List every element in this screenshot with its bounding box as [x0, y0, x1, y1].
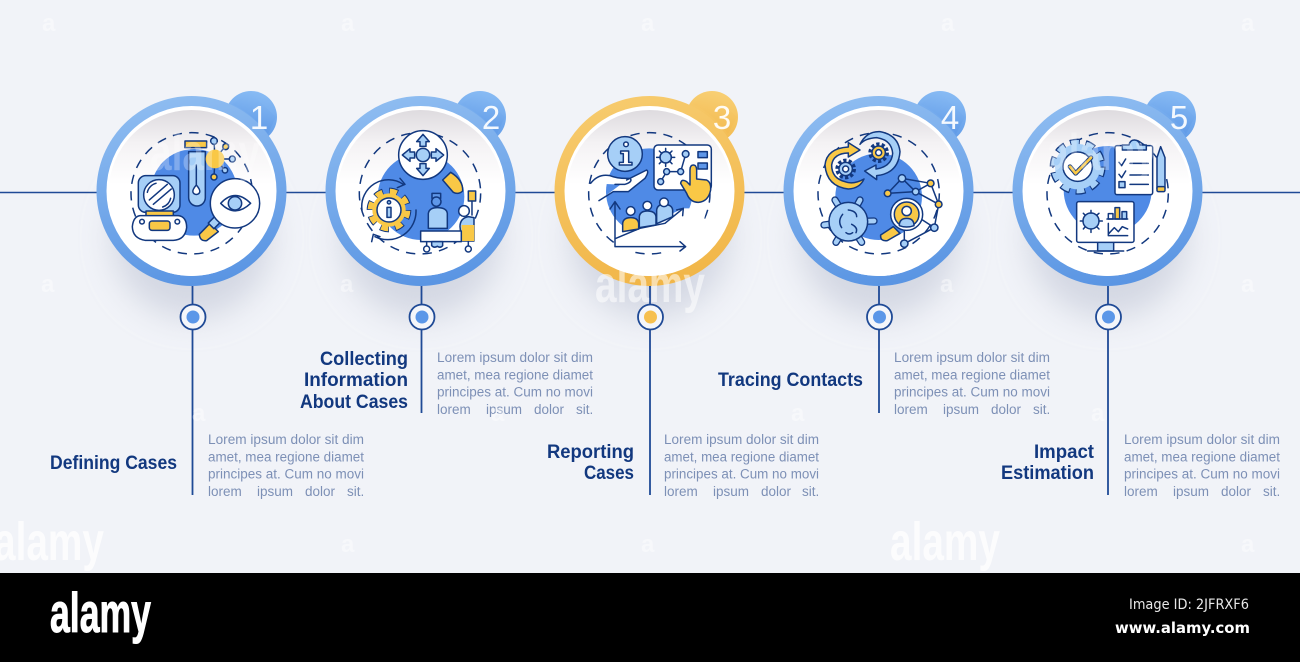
icon: scale, test tube, virus and eye magnifier [131, 133, 260, 254]
icon: check gear, clipboard, pencil, monitor [1047, 133, 1168, 254]
step 2 body text: Lorem ipsum dolor sit dim [437, 350, 593, 365]
watermarks: a [1241, 271, 1255, 298]
watermarks: a [791, 400, 805, 427]
footer website: www.alamy.com [1115, 619, 1250, 637]
step 2 heading [300, 349, 408, 413]
watermarks: a [340, 271, 354, 298]
step 1 body text: principes at. Cum no movi [208, 466, 364, 482]
step 4 body text: lorem [894, 402, 928, 417]
step 4 body text: amet, mea regione diamet [894, 368, 1050, 382]
watermarks: a [1241, 10, 1255, 37]
step 2 body text [437, 350, 593, 417]
step 5 body text: principes at. Cum no movi [1124, 466, 1280, 482]
step 1 body text: Lorem ipsum dolor sit dim [208, 432, 364, 447]
watermarks: a [941, 10, 955, 37]
watermarks: a [491, 400, 505, 427]
step 3 body text [664, 432, 819, 499]
step 3 heading: Cases [584, 463, 634, 484]
step 2 body text: principes at. Cum no movi [437, 384, 593, 400]
watermarks: a [940, 271, 954, 298]
step 5 body text: ipsum [1173, 484, 1209, 499]
step 1 body text: dolor [305, 484, 336, 499]
step 3 body text: Lorem ipsum dolor sit dim [664, 432, 819, 447]
step 1 circle badge [96, 91, 286, 318]
step 4 body text: dolor [991, 402, 1022, 417]
watermarks: a [341, 10, 355, 37]
step 3 body text: principes at. Cum no movi [664, 466, 819, 482]
step 4 heading: Tracing Contacts [718, 370, 863, 391]
icon: info hand, touch chart, team growth [589, 133, 711, 254]
step 2 body text: sit. [576, 402, 593, 417]
step 5 circle badge: 5 [1170, 99, 1188, 136]
step 4: tracing contacts [718, 91, 1050, 417]
footer image id: Image ID: 2JFRXF6 [1129, 597, 1249, 613]
step 3 body text: lorem [664, 484, 698, 499]
watermarks: alamy [890, 512, 1000, 572]
step 3 body text: sit. [802, 484, 819, 499]
step 5 body text: lorem [1124, 484, 1158, 499]
watermarks: a [192, 400, 206, 427]
footer logo: alamy [50, 581, 151, 644]
step 4 body text: ipsum [943, 402, 979, 417]
watermarks: a [341, 531, 355, 558]
icon: magnifier, gear with info, patient bed [359, 131, 481, 254]
step 2 circle badge: 2 [482, 99, 500, 136]
step 4 body text: Lorem ipsum dolor sit dim [894, 350, 1050, 365]
step 3 body text: amet, mea regione diamet [664, 450, 819, 464]
step 2 body text: dolor [534, 402, 565, 417]
step 5 body text: Lorem ipsum dolor sit dim [1124, 432, 1280, 447]
watermarks: a [641, 10, 655, 37]
step 5 body text: dolor [1221, 484, 1252, 499]
step 1 body text: ipsum [257, 484, 293, 499]
step 5 heading: Estimation [1001, 463, 1094, 484]
watermarks: alamy [1047, 124, 1157, 182]
step 5 body text [1124, 432, 1280, 499]
step 2 body text: lorem [437, 402, 471, 417]
step 1 connector and node [180, 286, 206, 495]
step 5 heading [1001, 442, 1095, 484]
step 1 body text: sit. [347, 484, 364, 499]
step 2 body text: ipsum [486, 402, 522, 417]
step 3 circle badge: 3 [713, 99, 731, 136]
step 2 circle badge [326, 91, 516, 318]
step 4 body text: principes at. Cum no movi [894, 384, 1050, 400]
watermarks: alamy [150, 124, 260, 182]
step 2 heading: About Cases [300, 392, 408, 413]
icon: cycling gears, virus, contact network [818, 132, 942, 254]
timeline horizontal line [0, 192, 1300, 194]
step 2 heading: Information [304, 370, 408, 391]
step 4 circle badge [784, 91, 974, 318]
step 4 connector and node [867, 286, 892, 413]
step 5 circle badge [1012, 91, 1202, 318]
step 2 body text: amet, mea regione diamet [437, 368, 593, 382]
watermarks: a [1241, 531, 1255, 558]
step 4 circle badge: 4 [941, 99, 959, 136]
step 2 connector and node [410, 286, 434, 413]
step 1 body text: amet, mea regione diamet [208, 450, 364, 464]
step 3 circle badge [554, 91, 744, 318]
step 3 body text: dolor [761, 484, 792, 499]
step 5: impact estimation [1001, 91, 1280, 499]
step 3 heading: Reporting [547, 442, 634, 463]
step 1 body text: lorem [208, 484, 242, 499]
watermarks: a [641, 531, 655, 558]
step 2 heading: Collecting [320, 349, 408, 370]
footer bar [0, 573, 1300, 662]
step 2: collecting information [300, 91, 593, 417]
step 3 body text: ipsum [713, 484, 749, 499]
step 1 circle badge: 1 [250, 99, 268, 136]
watermarks: a [1091, 400, 1105, 427]
watermarks: a [41, 271, 55, 298]
step 3 heading [547, 442, 634, 484]
step 1 body text [208, 432, 364, 499]
step 5 heading: Impact [1034, 442, 1095, 463]
watermarks: alamy [595, 256, 705, 314]
step 4 body text [894, 350, 1050, 417]
step 1: defining cases [50, 91, 364, 499]
step 5 body text: sit. [1263, 484, 1280, 499]
step 5 body text: amet, mea regione diamet [1124, 450, 1280, 464]
step 3: reporting cases [547, 91, 819, 499]
step 3 connector and node [638, 286, 663, 495]
watermarks: a [42, 10, 56, 37]
step 5 connector and node [1096, 286, 1121, 495]
step 4 body text: sit. [1033, 402, 1050, 417]
step 1 heading: Defining Cases [50, 453, 177, 474]
